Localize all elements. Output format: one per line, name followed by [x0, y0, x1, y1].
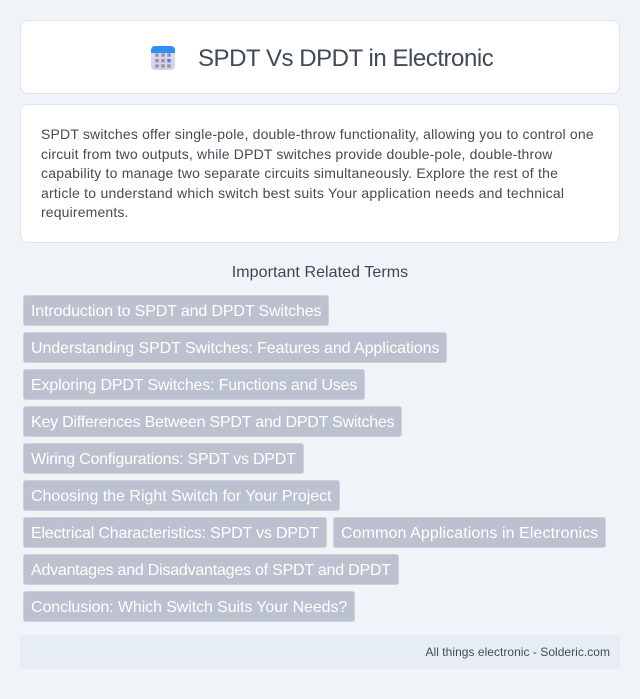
summary text: circuit from two outputs, while DPDT switches provide double-pole, double-throw — [41, 146, 553, 162]
tag: Common Applications in Electronics — [341, 525, 598, 542]
tag — [23, 332, 447, 363]
tag: Key Differences Between SPDT and DPDT Switches — [31, 414, 394, 431]
tag: Choosing the Right Switch for Your Project — [31, 488, 332, 505]
section heading: Important Related Terms — [232, 264, 408, 281]
tag: Electrical Characteristics: SPDT vs DPDT — [31, 525, 319, 542]
summary card — [20, 104, 620, 243]
header card — [20, 20, 620, 94]
summary text: requirements. — [41, 204, 129, 220]
summary text — [41, 126, 594, 220]
icon: calendar — [151, 46, 175, 70]
footer bar — [20, 635, 620, 669]
tag — [23, 406, 402, 437]
tag: Exploring DPDT Switches: Functions and Uses — [31, 377, 357, 394]
tag: Understanding SPDT Switches: Features and Applications — [31, 340, 439, 357]
summary text: article to understand which switch best suits Your application needs and technical — [41, 185, 564, 201]
tag — [23, 369, 365, 400]
tag list — [23, 295, 606, 622]
tag — [23, 554, 399, 585]
tag: Introduction to SPDT and DPDT Switches — [31, 303, 321, 320]
summary text: capability to manage two separate circuits simultaneously. Explore the rest of the — [41, 165, 558, 181]
tag — [23, 517, 327, 548]
footer text: All things electronic - Solderic.com — [426, 645, 610, 659]
summary text: SPDT switches offer single-pole, double-throw functionality, allowing you to control one — [41, 126, 594, 142]
tag — [23, 591, 355, 622]
tag — [23, 480, 340, 511]
tag — [23, 443, 304, 474]
tag: Conclusion: Which Switch Suits Your Needs? — [31, 599, 347, 616]
tag — [333, 517, 606, 548]
tag: Wiring Configurations: SPDT vs DPDT — [31, 451, 296, 468]
title: SPDT Vs DPDT in Electronic — [198, 45, 493, 72]
tag — [23, 295, 329, 326]
tag: Advantages and Disadvantages of SPDT and DPDT — [31, 562, 391, 579]
